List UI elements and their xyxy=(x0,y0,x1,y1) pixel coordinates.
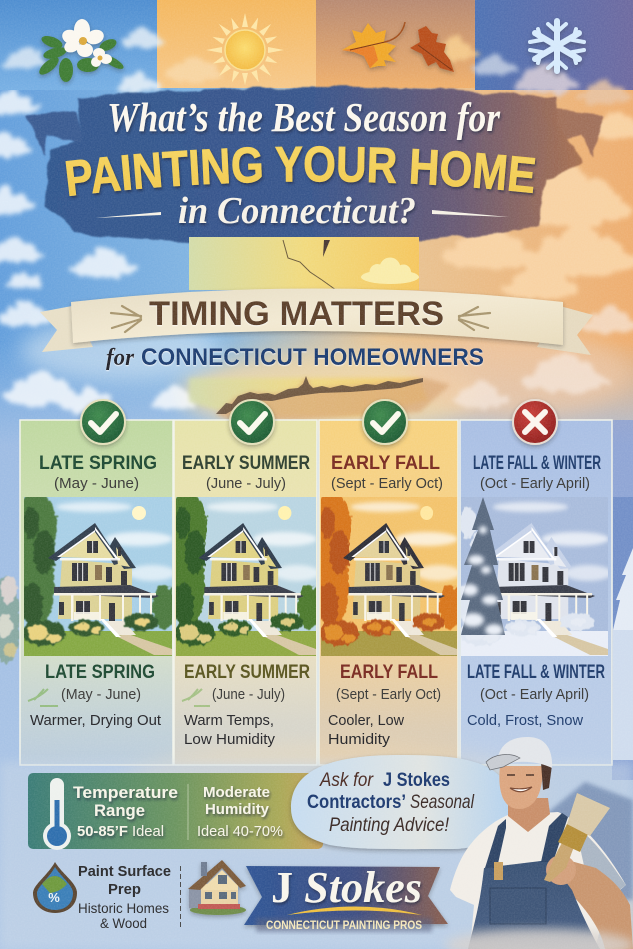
panel: temperature and humidity: Range xyxy=(94,801,145,820)
season strip: winter xyxy=(475,0,633,90)
brush xyxy=(544,832,578,882)
panel: temperature and humidity: Humidity xyxy=(205,801,270,818)
logo wordmark: J Stokes xyxy=(271,863,422,912)
strip clouds xyxy=(1,27,632,104)
text: paint surface prep: Historic Homes xyxy=(78,900,169,916)
panel: early summer: (June - July) xyxy=(212,686,285,703)
callout: seasonal advice: J Stokes xyxy=(383,769,450,791)
text: paint surface prep: Paint Surface xyxy=(78,863,171,880)
logo: J Stokes xyxy=(244,863,448,932)
title line 1: What’s the Best Season for xyxy=(107,94,501,140)
title text xyxy=(66,94,538,232)
panel: late fall and winter: (Oct - Early April) xyxy=(480,475,590,492)
panel: late fall and winter: Cold, Frost, Snow xyxy=(467,713,584,729)
text: paint surface prep xyxy=(78,863,171,931)
icon: paint drop: % xyxy=(48,890,60,905)
panel: temperature and humidity: Moderate xyxy=(203,784,270,801)
panel: early fall: EARLY FALL xyxy=(331,453,440,474)
callout: seasonal advice: Contractors’ xyxy=(307,791,406,813)
panel: lower wash xyxy=(0,762,633,949)
t-shirt xyxy=(450,812,626,949)
background house silhouette xyxy=(545,782,633,900)
panel: early fall: Cooler, Low xyxy=(328,713,405,729)
season strip: fall xyxy=(316,0,475,88)
Connecticut map panel bottom and skyline xyxy=(189,376,450,420)
panel: early fall: Humidity xyxy=(328,732,391,748)
cap xyxy=(497,737,552,768)
panel: late fall and winter: (Oct - Early April) xyxy=(480,686,589,703)
subheading: CONNECTICUT HOMEOWNERS xyxy=(141,344,484,371)
panel: early fall: EARLY FALL xyxy=(340,662,438,683)
right edge winter scenery xyxy=(613,497,633,760)
hand xyxy=(546,855,576,885)
callout: seasonal advice: Ask for xyxy=(319,769,374,791)
panel: late spring: (May - June) xyxy=(54,475,139,492)
timing heading: TIMING MATTERS xyxy=(149,295,444,333)
face xyxy=(499,766,543,809)
panel: late spring xyxy=(15,420,176,765)
panel: early fall: (Sept - Early Oct) xyxy=(336,686,441,703)
panel: early summer: Low Humidity xyxy=(184,732,276,748)
panel: early fall xyxy=(313,420,461,765)
panel: late spring: Warmer, Drying Out xyxy=(30,713,161,729)
title ribbon xyxy=(26,87,604,244)
panel: temperature and humidity: Temperature xyxy=(73,783,178,802)
house: winter xyxy=(452,493,612,656)
icon: green check fall xyxy=(363,400,407,444)
logo tagline: CONNECTICUT PAINTING PROS xyxy=(266,918,422,932)
house: fall xyxy=(313,493,461,656)
icon: green check spring xyxy=(81,400,125,444)
panel: early summer xyxy=(167,420,320,765)
icon: snowflake xyxy=(530,21,584,71)
icon: small house xyxy=(188,860,246,915)
subheading: for xyxy=(106,345,135,371)
panel: early summer: Warm Temps, xyxy=(184,713,274,729)
panel: late spring: LATE SPRING xyxy=(39,453,157,474)
panel: late fall and winter xyxy=(452,420,612,765)
title line 3: in Connecticut? xyxy=(178,190,416,232)
panel: temperature and humidity: Ideal 40-70% xyxy=(197,823,283,840)
season strip: summer xyxy=(157,0,316,88)
panel: late spring: (May - June) xyxy=(61,686,141,703)
icon: sun xyxy=(206,13,284,85)
panel: temperature and humidity: 50-85’F Ideal xyxy=(77,823,164,840)
callout: seasonal advice xyxy=(291,755,512,849)
icon: red cross winter xyxy=(513,400,557,444)
panel: early summer: EARLY SUMMER xyxy=(182,453,310,474)
mist over painter base xyxy=(445,929,633,949)
callout: seasonal advice: Painting Advice! xyxy=(329,814,450,836)
Connecticut map panel top xyxy=(189,237,419,290)
title line 2: PAINTING YOUR HOME xyxy=(66,146,538,199)
panel: early summer: EARLY SUMMER xyxy=(184,662,310,683)
house: spring xyxy=(15,493,176,656)
text: paint surface prep: Prep xyxy=(108,881,141,898)
house: summer xyxy=(167,493,320,656)
painter xyxy=(450,737,633,949)
panel: early fall: (Sept - Early Oct) xyxy=(331,475,443,492)
neck xyxy=(508,798,550,832)
text: paint surface prep: & Wood xyxy=(100,915,147,931)
overalls xyxy=(468,860,600,949)
snowy spruce tree xyxy=(461,497,505,636)
icon: paint drop xyxy=(33,862,77,913)
panel: timing ribbon xyxy=(40,288,593,355)
arm xyxy=(555,858,633,949)
icon: thermometer xyxy=(43,778,71,850)
icon: spring flower xyxy=(37,19,125,82)
panel: early summer: (June - July) xyxy=(206,475,286,492)
icon: autumn leaves xyxy=(342,22,454,72)
callout: seasonal advice: Seasonal xyxy=(410,791,475,813)
icon: green check summer xyxy=(230,400,274,444)
panel: temperature and humidity xyxy=(28,773,323,850)
panel: late spring: LATE SPRING xyxy=(45,662,155,683)
season strip: spring xyxy=(0,0,157,90)
left edge flowering bush xyxy=(0,576,20,664)
